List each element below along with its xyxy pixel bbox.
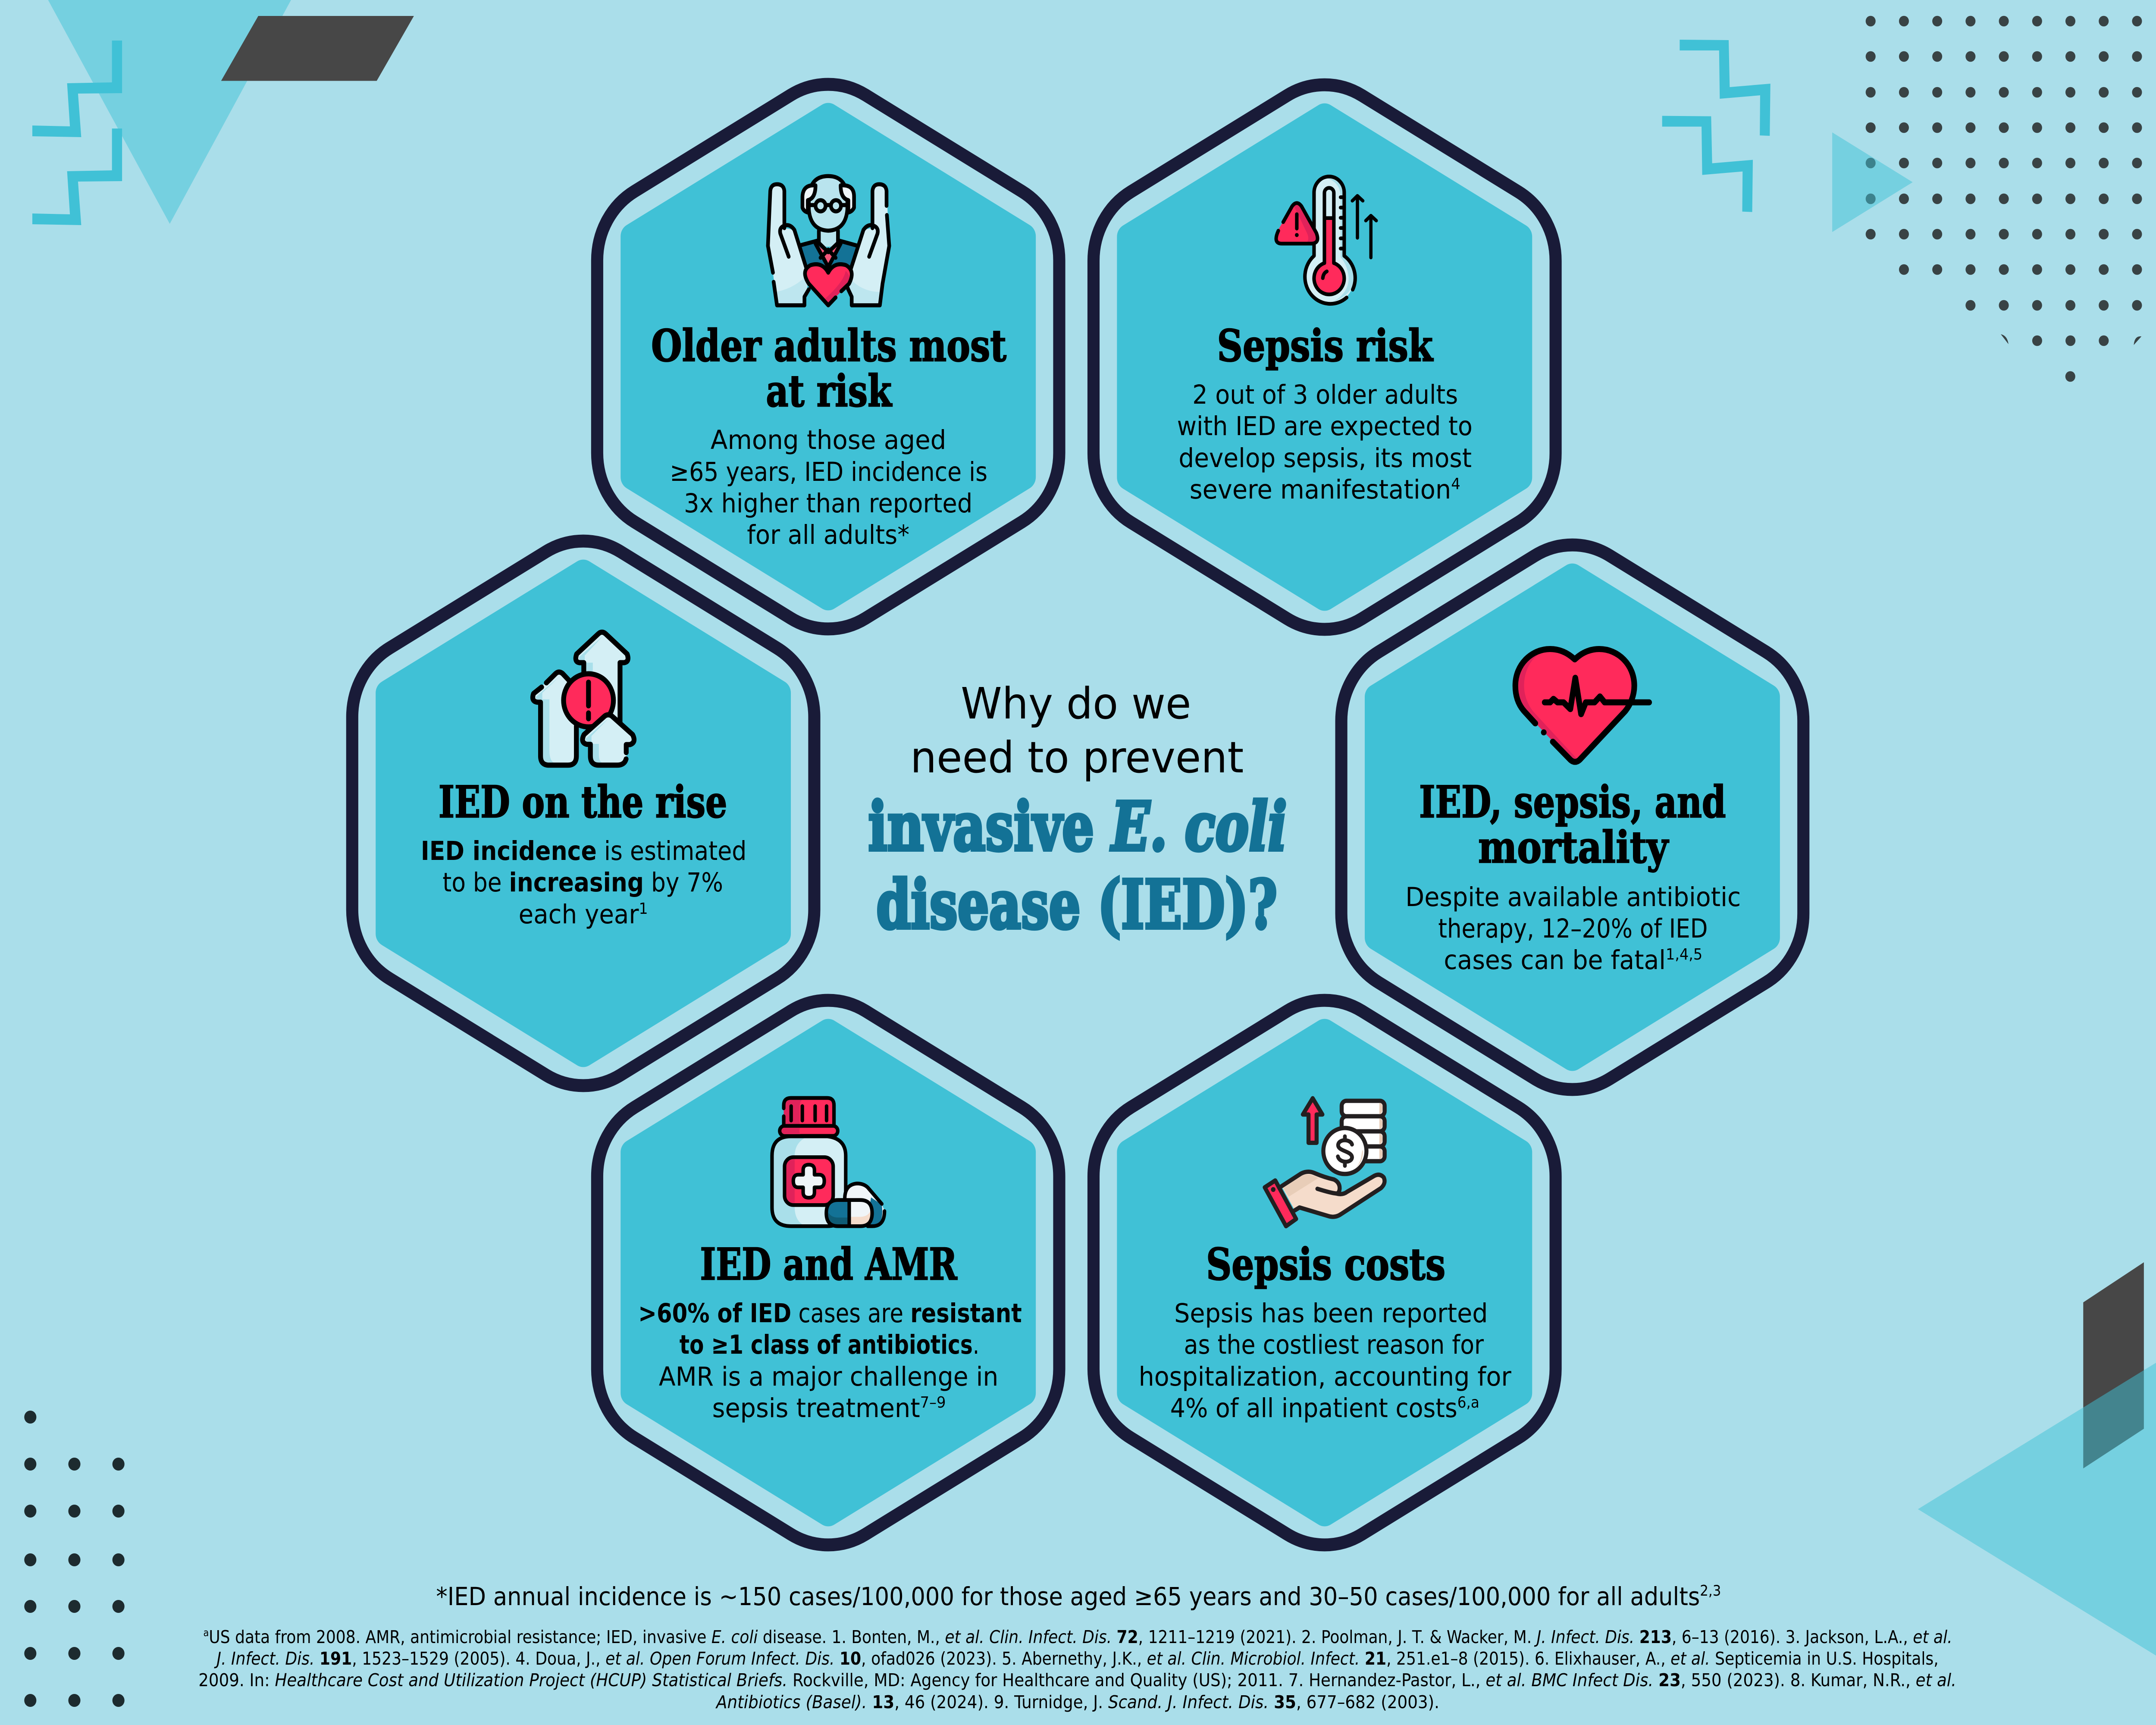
heading: Sepsis risk [1217,320,1434,372]
body text: 1,4,5 [1666,946,1702,963]
heading: IED, sepsis, and [1419,777,1726,828]
references: 2009. In: Healthcare Cost and Utilization Project (HCUP) Statistical Briefs. Rockville, MD: Agency for Healthcare and Quality (US); 2011. 7. Hernandez-Pastor, L., et al. BMC Infect Dis. 23, 550 (2023). 8. Kumar, N.R., et al. [198,1670,1956,1690]
references: Antibiotics (Basel). 13, 46 (2024). 9. Turnidge, J. Scand. J. Infect. Dis. 35, 677–682 (2003). [715,1692,1439,1712]
body text [670,424,987,550]
body text [638,1298,1022,1423]
heading: mortality [1478,822,1669,873]
body text: 4% of all inpatient costs [1170,1393,1467,1423]
body text: 4 [1451,475,1460,493]
body text [1177,379,1473,505]
body text: sepsis treatment [712,1393,920,1423]
decoration: top-right zigzags, dots and triangle [1662,21,2141,376]
panel: IED, sepsis, and mortality [1341,545,1803,1089]
title: need to prevent [910,732,1244,783]
body text: develop sepsis, its most [1178,442,1472,473]
body text: for all adults* [747,519,909,550]
body text: 1 [639,900,648,918]
decoration: bottom-left dots [24,1411,125,1707]
decoration: top-left shapes [32,0,414,225]
body text: to ≥1 class of antibiotics. [680,1329,979,1360]
heading: Sepsis costs [1206,1239,1445,1290]
body text: hospitalization, accounting for [1139,1361,1512,1392]
icon: medicine bottle and pills [772,1098,884,1226]
body text: with IED are expected to [1177,411,1473,441]
body text: Sepsis has been reported [1174,1298,1488,1328]
icon: heart with ECG line [1515,649,1649,762]
body text: as the costliest reason for [1184,1329,1484,1360]
heading: Older adults most [651,320,1006,372]
title: disease (IED)? [876,866,1277,944]
footnote: incidence note: *IED annual incidence is ~150 cases/100,000 for those aged ≥65 years and 30–50 cases/100,000 for all adults [436,1582,1741,1611]
icon: hand with coins and up arrow [1265,1098,1385,1226]
references [198,1627,1956,1712]
body text: IED incidence is estimated [421,835,746,866]
body text: severe manifestation [1190,474,1450,505]
icon: rising arrows with alert [533,632,634,765]
heading: IED and AMR [700,1239,957,1290]
panel: older adults most at risk [597,85,1059,629]
body text: Among those aged [711,424,946,455]
references: E. coli disease. 1. Bonten, M., et al. Clin. Infect. Dis. 72, 1211–1219 (2021). 2. Poolman, J. T. & Wacker, M. J. Infect. Dis. 213, 6–13 (2016). 3. Jackson, L.A., et al. [711,1627,1955,1647]
panel: sepsis risk [1094,85,1556,629]
panel: sepsis costs [1094,1000,1556,1545]
body text: AMR is a major challenge in [659,1361,998,1392]
icon: thermometer with warning triangle and up arrows [1275,176,1376,304]
body text [421,835,746,929]
references: J. Infect. Dis. 191, 1523–1529 (2005). 4. Doua, J., et al. Open Forum Infect. Dis. 10, ofad026 (2023). 5. Abernethy, J.K., et al. Clin. Microbiol. Infect. 21, 251.e1–8 (2015). 6. Elixhauser, A., et al. Septicemia in U.S. Hospitals, [214,1649,1939,1669]
body text [1405,881,1741,975]
references: a [204,1627,209,1639]
body text: 7–9 [920,1394,946,1411]
decoration: bottom-right shapes [1918,1262,2156,1656]
panel: IED on the rise [352,541,814,1085]
body text: Despite available antibiotic [1405,881,1741,912]
body text: 2 out of 3 older adults [1192,379,1458,410]
body text: to be increasing by 7% [442,867,723,897]
body text: 3x higher than reported [684,488,972,518]
body text: 6,a [1457,1394,1479,1411]
footnote: incidence note: 2,3 [1700,1582,1721,1599]
title: invasive E. coli [868,788,1287,866]
body text: each year [519,899,641,929]
body text: ≥65 years, IED incidence is [670,456,987,487]
heading [1419,777,1726,873]
title [868,678,1287,944]
heading [651,320,1006,417]
body text: cases can be fatal [1444,944,1667,975]
body text [1139,1298,1512,1423]
heading: at risk [766,366,893,417]
heading: IED on the rise [439,777,727,828]
icon: elderly person held in hands with heart [768,176,889,305]
body text: >60% of IED cases are resistant [638,1298,1022,1328]
references: US data from 2008. AMR, antimicrobial resistance; IED, invasive [209,1627,711,1647]
body text: therapy, 12–20% of IED [1438,913,1708,944]
panel: IED and AMR [597,1000,1059,1545]
title: Why do we [961,678,1191,729]
